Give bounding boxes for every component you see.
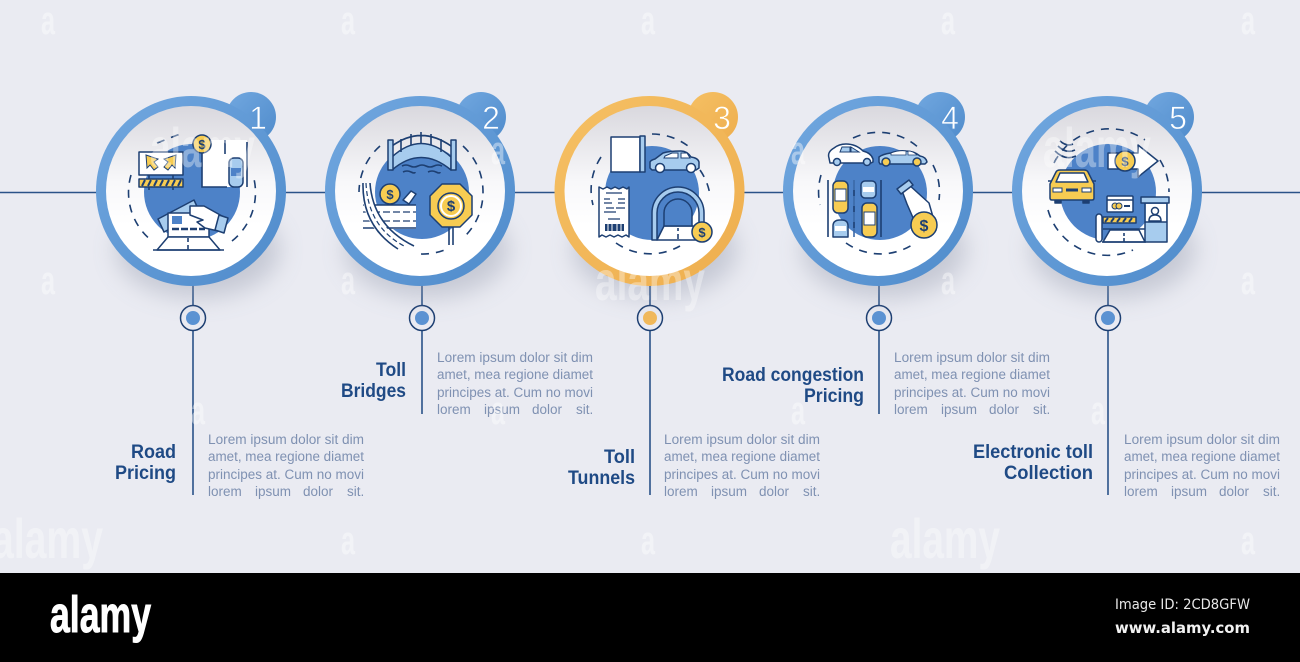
icon: congestion pricing [819,132,940,254]
body text 5: lorem [1124,484,1158,499]
watermarks: alamy [890,507,1000,570]
connector with node 1 [180,284,206,495]
icon: road pricing: $ [198,137,206,152]
body text 2: lorem [437,402,471,417]
body text 2: Lorem ipsum dolor sit dim [437,350,593,365]
circle badge 5: 5 [1169,100,1187,136]
body text 5: ipsum [1171,484,1207,499]
body text 3: amet, mea regione diamet [664,449,820,464]
heading: Road Pricing: Road [131,442,176,463]
circle badge 2 [325,92,515,298]
watermarks: alamy [595,249,705,312]
body text 5: sit. [1263,484,1280,499]
watermarks: a [491,129,505,173]
body text 4: amet, mea regione diamet [894,367,1050,382]
watermarks: a [641,0,655,43]
body text 5: amet, mea regione diamet [1124,449,1280,464]
watermarks: a [341,259,355,303]
body text 3: principes at. Cum no movi [664,467,820,482]
watermarks: a [1241,259,1255,303]
body text 3: ipsum [711,484,747,499]
icon: electronic toll collection [1048,129,1169,255]
step 3: Toll Tunnels [554,92,824,499]
icon: toll tunnel: $ [698,225,706,240]
heading: Toll Bridges: Toll [376,360,406,381]
circle badge 4: 4 [941,100,959,136]
body text 5: dolor [1219,484,1250,499]
heading: Road congestion Pricing: Road congestion [722,365,864,386]
watermarks: a [641,519,655,563]
body text 4: dolor [989,402,1020,417]
heading: Toll Bridges: Bridges [341,381,406,402]
body text 1: sit. [347,484,364,499]
body text 1: Lorem ipsum dolor sit dim [208,432,364,447]
heading: Toll Tunnels: Toll [604,447,635,468]
step 1: Road Pricing [96,92,368,499]
icon: toll bridge: $ [447,198,456,215]
footer bar [0,573,1300,662]
body text 4: sit. [1033,402,1050,417]
connector with node 3 [638,284,662,495]
watermarks: a [791,129,805,173]
icon: toll bridge: $ [386,187,394,202]
watermarks: a [791,389,805,433]
body text 2: dolor [532,402,563,417]
body text 2: ipsum [484,402,520,417]
body text 1: principes at. Cum no movi [208,467,364,482]
watermarks: alamy [1043,116,1151,179]
body text 4: principes at. Cum no movi [894,385,1050,400]
circle badge 1: 1 [249,100,267,136]
body text 5: principes at. Cum no movi [1124,467,1280,482]
watermarks: alamy [150,116,255,179]
heading: Toll Tunnels: Tunnels [568,468,635,489]
watermarks: a [941,259,955,303]
image id: Image ID: 2CD8GFW [1115,597,1250,613]
icon: toll tunnel [591,134,712,254]
body text 3: sit. [803,484,820,499]
watermarks: a [191,389,205,433]
body text 3: lorem [664,484,698,499]
icon: road pricing [129,134,255,250]
body text 1: amet, mea regione diamet [208,449,364,464]
body text 4: Lorem ipsum dolor sit dim [894,350,1050,365]
circle badge 3: 3 [713,100,731,136]
watermarks: a [491,389,505,433]
body text 5: Lorem ipsum dolor sit dim [1124,432,1280,447]
icon: toll bridge [359,132,483,254]
body text 2: principes at. Cum no movi [437,385,593,400]
circle badge 2: 2 [482,100,500,136]
site url: www.alamy.com [1115,619,1250,637]
body text 1: ipsum [255,484,291,499]
circle badge 5 [1012,92,1202,298]
connector with node 5 [1096,284,1120,495]
circle badge 3 [554,92,744,298]
heading: Road Pricing: Pricing [115,463,176,484]
watermarks: a [1241,519,1255,563]
watermarks: a [41,0,55,43]
body text 3: Lorem ipsum dolor sit dim [664,432,820,447]
heading: Road congestion Pricing: Pricing [804,386,864,407]
body text 4: ipsum [941,402,977,417]
circle badge 4 [783,92,973,298]
body text 2: sit. [576,402,593,417]
watermarks: a [941,0,955,43]
watermarks: a [341,519,355,563]
watermarks: a [1241,0,1255,43]
circle badge 1 [96,92,286,298]
connector with node 4 [866,284,892,414]
watermarks: a [41,259,55,303]
body text 1: dolor [303,484,334,499]
icon: congestion pricing: $ [920,218,929,235]
icon: electronic toll collection: $ [1121,154,1129,169]
watermarks: a [1091,389,1105,433]
watermarks: a [341,0,355,43]
horizontal timeline [0,192,1300,194]
heading: Electronic toll Collection: Collection [1004,463,1093,484]
body text 4: lorem [894,402,928,417]
connector with node 2 [410,284,434,414]
body text 1: lorem [208,484,242,499]
body text 2: amet, mea regione diamet [437,367,593,382]
body text 3: dolor [759,484,790,499]
step 2: Toll Bridges [325,92,597,417]
step 4: Road congestion Pricing [722,92,1054,417]
heading: Electronic toll Collection: Electronic toll [973,442,1093,463]
step 5: Electronic toll Collection [973,92,1284,499]
footer logo: alamy [50,586,151,643]
